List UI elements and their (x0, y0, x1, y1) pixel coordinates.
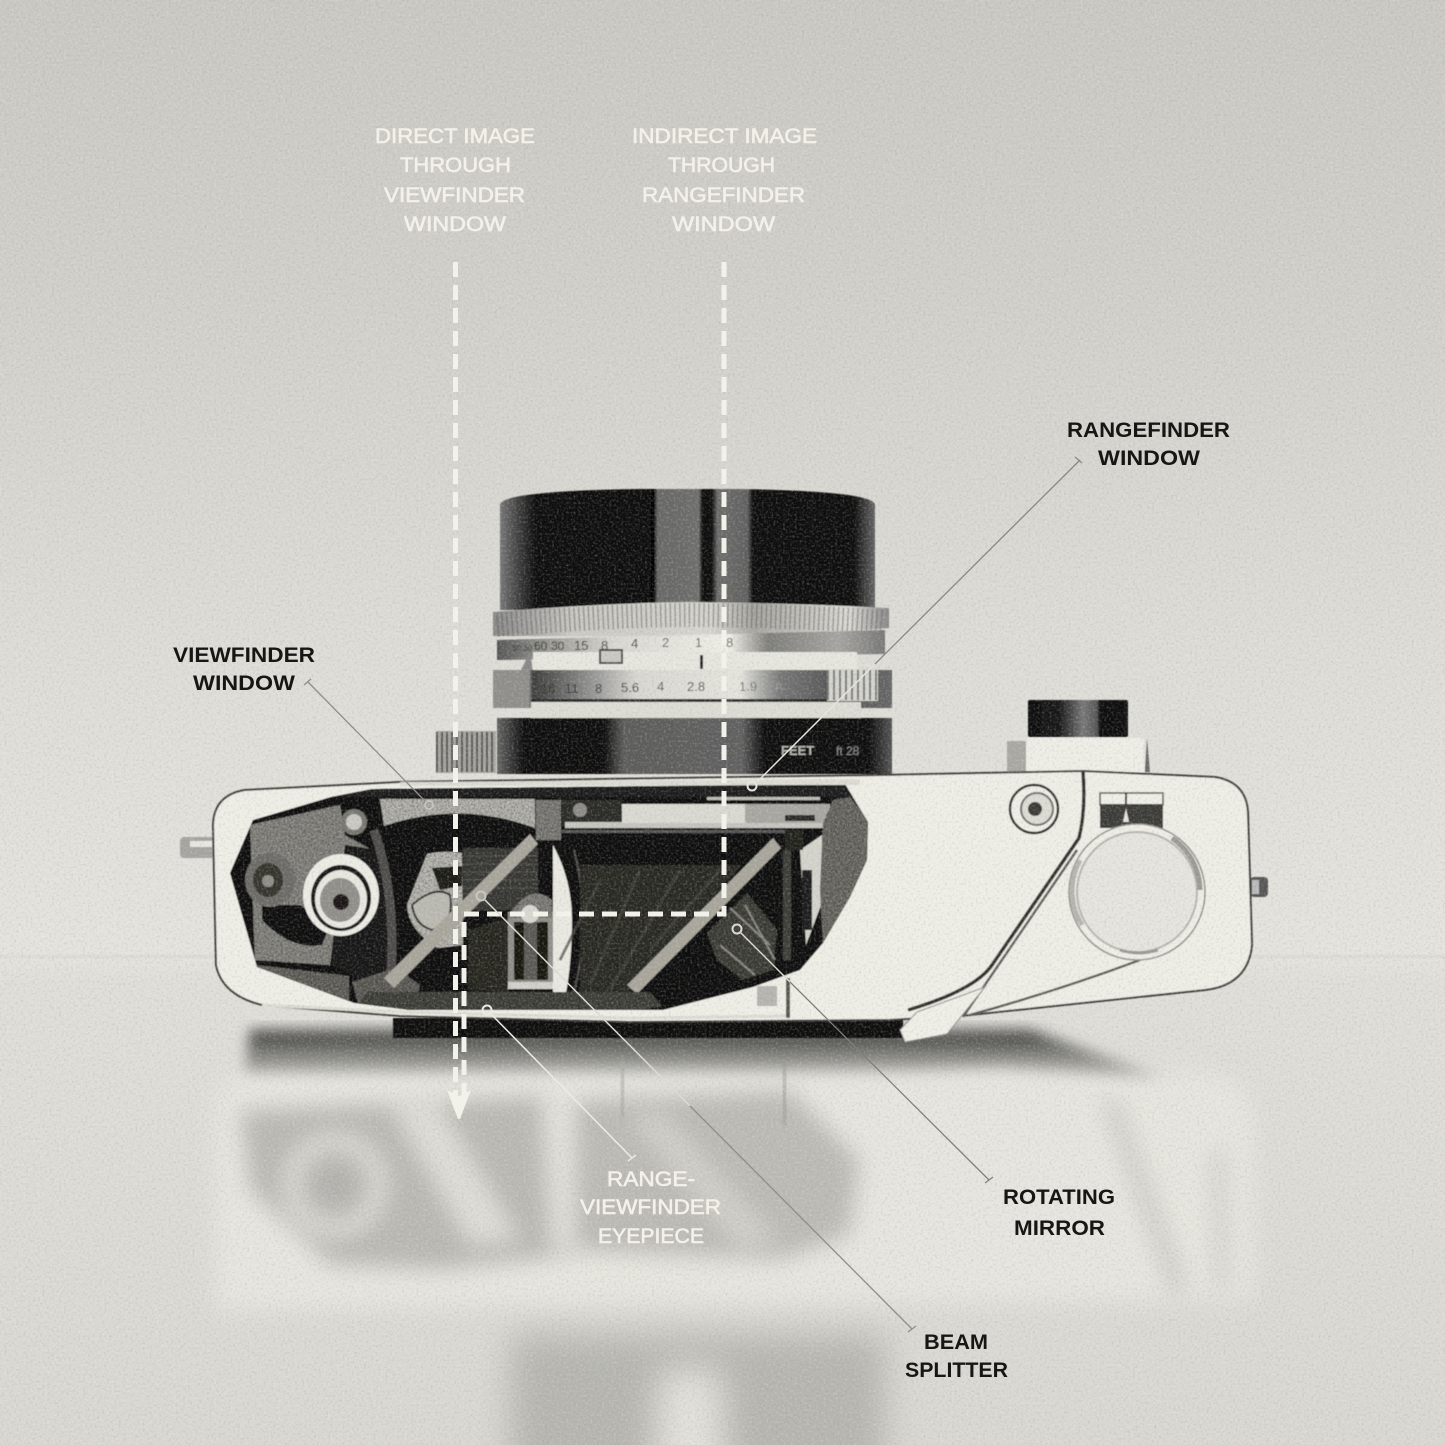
label: indirect image (632, 125, 817, 236)
label: direct image: VIEWFINDER (384, 184, 525, 207)
lens scale numbers: FEET (781, 743, 814, 758)
lens scale numbers: 8 (595, 681, 602, 696)
lower rim of cutaway (262, 1005, 790, 1018)
label: viewfinder window (173, 644, 315, 695)
leader: eyepiece (482, 1006, 636, 1161)
beam splitter mirror (384, 834, 538, 988)
light path: direct image (456, 262, 724, 1095)
side nubs (180, 837, 1268, 897)
wind dial disc (1069, 824, 1205, 960)
left wheel (245, 853, 295, 907)
speckled right wall (820, 797, 870, 945)
lens rings (493, 602, 892, 718)
top rim bar (400, 779, 860, 786)
label: beam splitter: BEAM (924, 1331, 988, 1354)
camera body outline (213, 771, 1252, 1022)
bottom textured bar (360, 992, 662, 1010)
black base under the body (393, 1018, 903, 1038)
lens barrel base (497, 718, 892, 774)
label: direct image: THROUGH (400, 154, 511, 177)
reflection of camera on the surface (0, 955, 1445, 1445)
lens hood (500, 489, 875, 610)
label: beam splitter: SPLITTER (905, 1359, 1008, 1382)
lens scale numbers: 8 (726, 635, 733, 650)
arrowhead (447, 1090, 471, 1119)
lens scale numbers: 1 (695, 635, 702, 650)
label: direct image: WINDOW (404, 213, 506, 236)
small dial top right (1007, 700, 1150, 772)
label: beam splitter (905, 1331, 1008, 1382)
eyepiece (303, 854, 379, 936)
lens scale numbers: 30 (551, 639, 565, 653)
right linkage (783, 830, 823, 960)
camera (180, 489, 1268, 1042)
leader: rangefinder window (748, 457, 1082, 790)
label: rotating mirror: ROTATING (1003, 1186, 1115, 1209)
lens scale numbers: 2.8 (687, 679, 705, 694)
label: viewfinder window: VIEWFINDER (173, 644, 315, 667)
lens scale numbers: 4 (631, 636, 638, 651)
lens scale numbers: 4 (657, 679, 664, 694)
rotating mirror (627, 838, 781, 994)
lens scale numbers: 60 30 (512, 644, 533, 653)
lens scale numbers: 8 (601, 638, 608, 653)
light leaf mechanism (407, 852, 463, 948)
cutaway interior (225, 780, 875, 1020)
lens scale numbers (512, 635, 860, 758)
wind lever tip (900, 987, 985, 1042)
exposure counter window (1100, 793, 1163, 828)
leader: rotating mirror (732, 924, 993, 1183)
top dark band (225, 786, 875, 797)
wind lever lines (963, 850, 1140, 1017)
focus knob left (436, 731, 496, 773)
label: rangefinder window: WINDOW (1098, 447, 1200, 470)
label: range-viewfinder eyepiece: RANGE- (607, 1168, 695, 1191)
lens scale numbers: 2 (662, 635, 669, 650)
label: rangefinder window (1067, 419, 1230, 470)
leader: viewfinder window (304, 679, 433, 809)
lens scale numbers: 1.9 (739, 679, 757, 694)
label: indirect image: INDIRECT IMAGE (632, 125, 817, 148)
label: rangefinder window: RANGEFINDER (1067, 419, 1230, 442)
label: range-viewfinder eyepiece (580, 1168, 721, 1248)
label: range-viewfinder eyepiece: EYEPIECE (598, 1225, 704, 1248)
leader: beam splitter (476, 892, 916, 1332)
label: indirect image: THROUGH (668, 154, 775, 177)
label: indirect image: RANGEFINDER (642, 184, 805, 207)
upper right plate (560, 797, 830, 833)
dark triangle block (468, 918, 508, 992)
label: indirect image: WINDOW (672, 213, 775, 236)
condenser lens (553, 845, 572, 993)
lens scale numbers: 5.6 (621, 680, 639, 695)
centre mechanism (508, 894, 553, 989)
lens scale numbers: 15 (574, 638, 588, 653)
striped dark parallelogram (580, 865, 742, 995)
body seam (908, 772, 1084, 1010)
light path: indirect image (464, 262, 724, 1095)
lens scale numbers: 16 (541, 681, 555, 696)
lens scale numbers: 11 (565, 681, 578, 696)
rotating mirror mechanism (707, 893, 777, 980)
label: range-viewfinder eyepiece: VIEWFINDER (580, 1196, 721, 1219)
label: viewfinder window: WINDOW (193, 672, 295, 695)
label: rotating mirror: MIRROR (1014, 1217, 1105, 1240)
lens scale numbers: A (775, 680, 783, 694)
left grey plate (249, 804, 370, 966)
striped dark wall (463, 848, 538, 910)
mirror foot cluster (352, 968, 420, 1007)
label: direct image (375, 125, 535, 236)
lens scale numbers: 60 (534, 639, 548, 653)
grey light plate with arch (380, 799, 535, 828)
label: rotating mirror (1003, 1186, 1115, 1240)
lens scale numbers: ft 28 (836, 744, 860, 758)
label: direct image: DIRECT IMAGE (375, 125, 535, 148)
small window lower right (757, 978, 790, 1018)
strap screw (1010, 785, 1058, 833)
left screw (341, 809, 367, 835)
